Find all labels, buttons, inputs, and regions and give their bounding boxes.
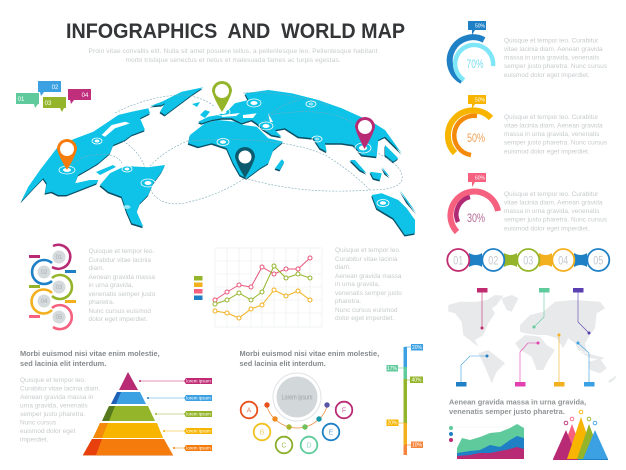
- subtitle: Proin vitae convallis elit. Nulla sit amet posuere tellus, a pellentesque leo. Pellentesque habitant: [88, 48, 378, 55]
- pin: magenta: [355, 117, 375, 149]
- circle diagram: A: [247, 408, 252, 414]
- gauge: 30%: 60%: [475, 176, 486, 182]
- pyramid labels: [139, 378, 212, 451]
- circle diagram: E: [329, 430, 334, 436]
- chart text: pharetra.: [335, 298, 361, 305]
- snake text: Curabitur vitae lacinia: [88, 257, 151, 264]
- map shadow: [20, 89, 416, 236]
- vertical timeline: [386, 344, 423, 455]
- gauge text 3: vitae lacinia diam. Aenean gravida: [504, 200, 603, 206]
- gauge text 2: massa in urna gravida, venenatis: [504, 131, 600, 138]
- pyramid text: urna gravida, venenatis: [20, 402, 88, 410]
- chart text: Aenean gravida massa: [335, 273, 402, 280]
- vertical timeline: 40%: [411, 378, 422, 384]
- title: INFOGRAPHICS AND WORLD MAP: [66, 19, 405, 43]
- flight routes: [67, 92, 402, 204]
- pin: green: [212, 81, 232, 112]
- snake steps: 01: [56, 255, 63, 261]
- pyramid text: Quisque et tempor leo.: [20, 377, 86, 384]
- gauge text 2: euismod dolor eget imperdiet.: [504, 148, 590, 156]
- gauge text 3: massa in urna gravida, venenatis: [504, 208, 600, 215]
- snake steps: 03: [56, 285, 63, 291]
- heading: circle diagram: Morbi euismod nisi vitae enim molestie,: [240, 349, 379, 358]
- pyramid labels: lorem ipsum: [186, 412, 211, 417]
- numbered chain 01-05: 04: [558, 254, 569, 268]
- gauge text 1: semper justo pharetra. Nunc cursus: [504, 63, 608, 70]
- gauge text 3: euismod dolor eget imperdiet.: [504, 226, 590, 232]
- line chart: [213, 248, 322, 327]
- snake text: Aenean gravida massa: [88, 274, 155, 281]
- gauge: 70%: [450, 21, 493, 81]
- gauge text 1: massa in urna gravida, venenatis: [504, 54, 600, 62]
- circle diagram: B: [260, 430, 265, 436]
- pin: dark teal: [235, 147, 255, 178]
- gauge: 30%: 30%: [467, 213, 485, 225]
- circle diagram: D: [306, 442, 312, 450]
- chart text: in urna gravida,: [335, 281, 380, 288]
- heading: pyramid: sed lacinia elit interdum.: [20, 359, 106, 368]
- grey world map: [448, 295, 617, 383]
- gauge text 1: vitae lacinia diam. Aenean gravida: [504, 46, 603, 53]
- snake text: diam.: [88, 265, 105, 272]
- pyramid labels: lorem ipsum: [186, 379, 211, 384]
- world map: [20, 87, 417, 236]
- location ripples: [59, 99, 389, 209]
- heading: pyramid: Morbi euismod nisi vitae enim molestie,: [20, 349, 160, 358]
- snake steps: 05: [56, 315, 63, 321]
- circle diagram: [241, 373, 352, 453]
- numbered chain 01-05: 03: [523, 254, 534, 268]
- map callouts: [456, 288, 594, 386]
- triangle chart: [553, 410, 608, 460]
- continents: [21, 87, 417, 235]
- pin: orange: [57, 139, 77, 170]
- heading: circle diagram: sed lacinia elit interdum.: [240, 359, 326, 368]
- chart text: dolor eget imperdiet.: [335, 315, 394, 322]
- gauge text 3: Quisque et tempor leo. Curabitur: [504, 191, 599, 198]
- gauge text 1: euismod dolor eget imperdiet.: [504, 72, 590, 79]
- snake text: dolor eget imperdiet.: [88, 316, 148, 323]
- snake text: pharetra.: [88, 299, 115, 306]
- vertical timeline: 20%: [412, 345, 423, 351]
- snake text: venenatis semper justo: [88, 291, 156, 298]
- numbered chain 01-05: 01: [453, 254, 464, 268]
- chart text: Nunc cursus euismod: [335, 307, 398, 314]
- snake text: Nunc cursus euismod: [88, 308, 151, 315]
- speech tags 01-04: 01: [18, 97, 25, 103]
- chart text: Curabitur vitae lacinia: [335, 256, 398, 263]
- pyramid text: Curabitur vitae lacinia diam.: [20, 386, 100, 392]
- heading: bottom right: Aenean gravida massa in urna gravida,: [449, 398, 586, 406]
- area chart: [449, 424, 524, 459]
- speech tags 01-04: 03: [45, 101, 52, 107]
- chart text: diam.: [335, 264, 351, 271]
- snake steps: 02: [41, 270, 48, 276]
- pyramid labels: lorem ipsum: [186, 446, 211, 451]
- vertical timeline: 17%: [387, 366, 398, 372]
- numbered chain 01-05: 02: [488, 254, 499, 268]
- snake steps: 04: [41, 299, 48, 305]
- gauge text 1: Quisque et tempor leo. Curabitur: [504, 38, 599, 44]
- circle diagram: Lorem ipsum: [282, 394, 313, 402]
- chart text: venenatis semper justo: [335, 290, 402, 297]
- pyramid text: Aenean gravida massa in: [20, 394, 94, 401]
- pyramid text: Nunc cursus: [20, 420, 57, 426]
- pyramid text: semper justo pharetra.: [20, 411, 85, 418]
- gauge: 30%: [450, 173, 498, 232]
- numbered chain 01-05: 05: [593, 254, 604, 268]
- circle diagram: F: [342, 408, 346, 414]
- gauge text 2: semper justo pharetra. Nunc cursus: [504, 140, 608, 146]
- gauge text 2: Quisque et tempor leo. Curabitur: [504, 114, 599, 121]
- circle diagram: C: [281, 442, 287, 450]
- speech tags 01-04: [16, 81, 91, 112]
- subtitle: [88, 48, 378, 64]
- inland seas: [102, 113, 273, 137]
- gauge: 50%: 50%: [475, 98, 486, 104]
- gauge: 70%: 50%: [475, 24, 486, 30]
- numbered chain 01-05: [447, 249, 609, 271]
- pyramid text: imperdiet.: [20, 436, 49, 444]
- speech tags 01-04: 02: [52, 85, 59, 91]
- vertical timeline: 10%: [412, 442, 423, 448]
- chart legend: [194, 276, 202, 300]
- snake steps: [29, 245, 76, 329]
- snake text: Quisque et tempor leo.: [88, 248, 154, 255]
- subtitle: morbi tristique senectus et netus et malesuada fames ac turpis egestas.: [126, 57, 341, 64]
- heading: bottom right: venenatis semper justo pharetra.: [449, 407, 565, 416]
- speech tags 01-04: 04: [82, 93, 89, 99]
- chart text: Quisque et tempor leo.: [335, 247, 401, 254]
- gauge: 50%: [448, 95, 491, 155]
- gauge text 3: semper justo pharetra. Nunc cursus: [504, 216, 608, 224]
- pyramid labels: lorem ipsum: [186, 396, 211, 401]
- pyramid: [83, 372, 173, 456]
- vertical timeline: 20%: [387, 420, 398, 426]
- gauge text 2: vitae lacinia diam. Aenean gravida: [504, 122, 603, 130]
- pyramid labels: lorem ipsum: [186, 429, 211, 434]
- gauge: 50%: 50%: [467, 133, 485, 145]
- snake text: in urna gravida,: [88, 282, 133, 289]
- gauge: 70%: 70%: [466, 59, 484, 71]
- pyramid text: euismod dolor eget: [20, 428, 75, 435]
